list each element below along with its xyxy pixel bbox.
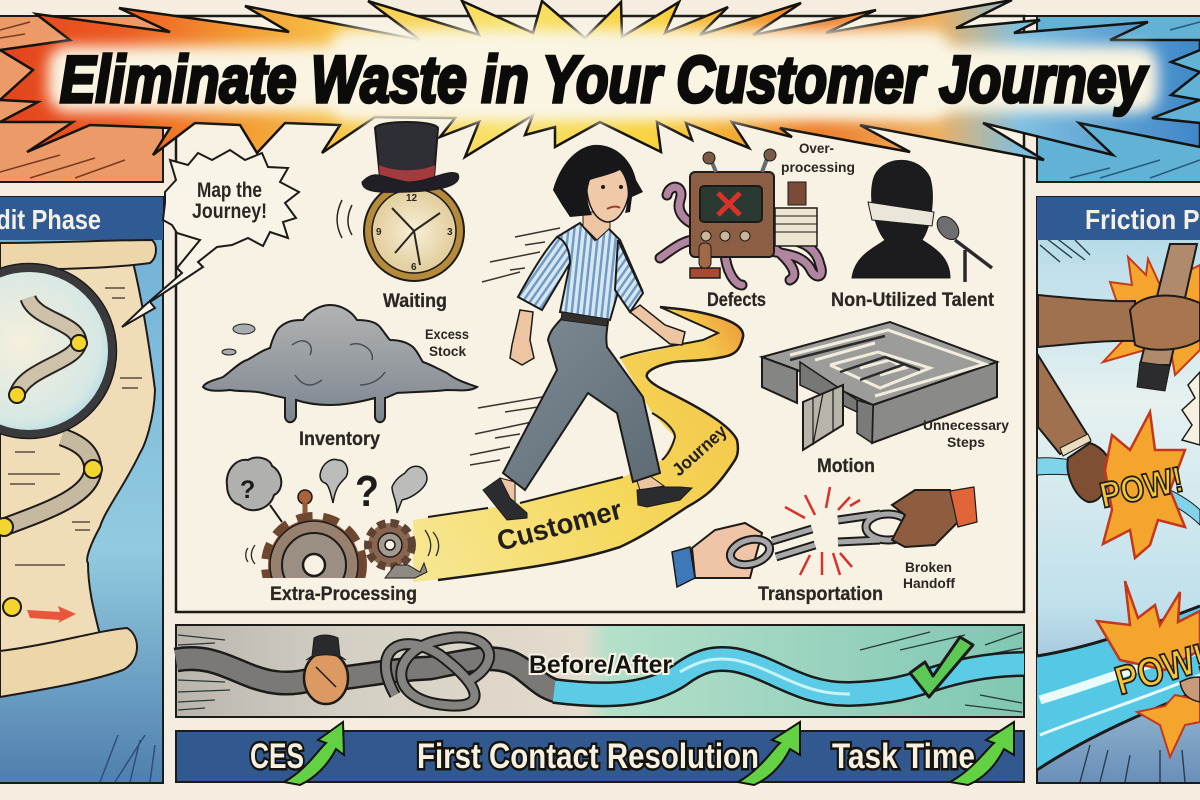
- blue flowing stream: [554, 659, 1024, 694]
- road label: customer: Customer: [494, 494, 625, 557]
- pow burst 2: [1097, 581, 1200, 704]
- panel: central waste scene background: [176, 16, 1024, 612]
- pow burst 1: [1096, 412, 1187, 558]
- handle and fist: [1038, 244, 1200, 391]
- shoes: [483, 478, 527, 520]
- panel: before and after strip: [176, 625, 1024, 717]
- label: over-processing: [781, 140, 855, 175]
- icon: top hat clock: [337, 122, 464, 281]
- shirt: [557, 223, 642, 320]
- panel: top right comic corner: [1037, 16, 1200, 182]
- speed lines: [1040, 235, 1185, 782]
- yellow journey road: [413, 307, 743, 582]
- trousers: [503, 318, 660, 490]
- audit phase header: [0, 197, 163, 240]
- magnifying glass: [0, 264, 116, 438]
- panel: friction points: [1037, 197, 1200, 783]
- icon: silenced talent: [852, 160, 992, 282]
- metric: task time: [832, 722, 1014, 785]
- label: broken handoff: Broken: [905, 559, 952, 575]
- speech fragment: [1182, 372, 1200, 445]
- parchment scroll: [0, 240, 156, 697]
- metric: CES: [250, 722, 344, 785]
- label: unnecessary steps: [923, 417, 1009, 450]
- ankles: [500, 476, 664, 510]
- metric: task time: Task Time: [832, 737, 975, 776]
- speech bubble: [122, 150, 299, 327]
- speech bubble: Map the: [197, 179, 262, 202]
- icon: rusty gears: [226, 456, 440, 578]
- metric: first contact resolution: First Contact Resolution: [417, 737, 759, 776]
- label: over-processing: Over-: [799, 140, 834, 156]
- title burst: [0, 0, 1200, 160]
- label: extra-processing: Extra-Processing: [270, 584, 417, 605]
- label: unnecessary steps: Steps: [947, 434, 985, 450]
- icon: broken chain handoff: [672, 487, 977, 587]
- icon: top hat clock: 6: [411, 262, 417, 273]
- forearms and hands: [510, 310, 534, 365]
- label: broken handoff: [903, 559, 955, 591]
- label: defects: Defects: [707, 290, 766, 311]
- water streams: [1037, 458, 1200, 770]
- hand at right edge: [1180, 677, 1200, 702]
- icon: inventory cloud: [203, 305, 477, 422]
- label: non-utilized talent: Non-Utilized Talent: [831, 290, 995, 311]
- label: excess stock: Excess: [425, 326, 469, 342]
- check mark: [910, 637, 973, 697]
- label: excess stock: [425, 326, 469, 359]
- friction dots: [0, 335, 102, 616]
- red arrow: [27, 606, 76, 623]
- metric: CES: CES: [250, 737, 304, 776]
- top rule: [0, 15, 1200, 17]
- icon: rusty gears: ?: [355, 467, 379, 516]
- burst behind fist: [1103, 257, 1200, 375]
- icon: rusty gears: ?: [240, 476, 255, 504]
- bottom burst: [1137, 695, 1200, 757]
- woman walking: [483, 145, 692, 520]
- speed lines: [470, 228, 560, 465]
- belt: [561, 312, 608, 326]
- grey tangled pipe: [176, 637, 562, 706]
- icon: top hat clock: 9: [376, 227, 382, 238]
- icon: top hat clock: 3: [447, 227, 453, 238]
- speech bubble: Journey!: [192, 200, 267, 223]
- icon: top hat clock: 12: [406, 193, 418, 204]
- label: unnecessary steps: Unnecessary: [923, 417, 1009, 433]
- label: transportation: Transportation: [758, 584, 883, 605]
- journey path on scroll: [4, 437, 93, 527]
- before/after label: Before/After: [529, 651, 672, 679]
- icon: maze: [762, 322, 997, 450]
- pow burst 1: POW!: [1096, 458, 1187, 516]
- label: waiting: Waiting: [383, 291, 447, 312]
- hair: [553, 145, 643, 217]
- motion hatching: [178, 632, 1022, 712]
- panel: top left comic corner: [0, 16, 163, 182]
- label: broken handoff: Handoff: [903, 575, 955, 591]
- label: inventory: Inventory: [299, 429, 380, 450]
- label: over-processing: processing: [781, 159, 855, 175]
- panel: metrics bar: [176, 722, 1024, 785]
- mini clock: [304, 635, 348, 704]
- neck and face: [583, 212, 610, 240]
- central scene contents: [122, 122, 1009, 611]
- lower arm: [1038, 355, 1112, 502]
- metric: first contact resolution: [417, 722, 800, 785]
- friction points header: [1037, 197, 1200, 240]
- scroll scribbles: [8, 288, 142, 565]
- label: excess stock: Stock: [429, 343, 466, 359]
- label: motion: Motion: [817, 456, 875, 477]
- icon: defects robot: [660, 149, 821, 285]
- road label: journey: Journey: [668, 421, 731, 480]
